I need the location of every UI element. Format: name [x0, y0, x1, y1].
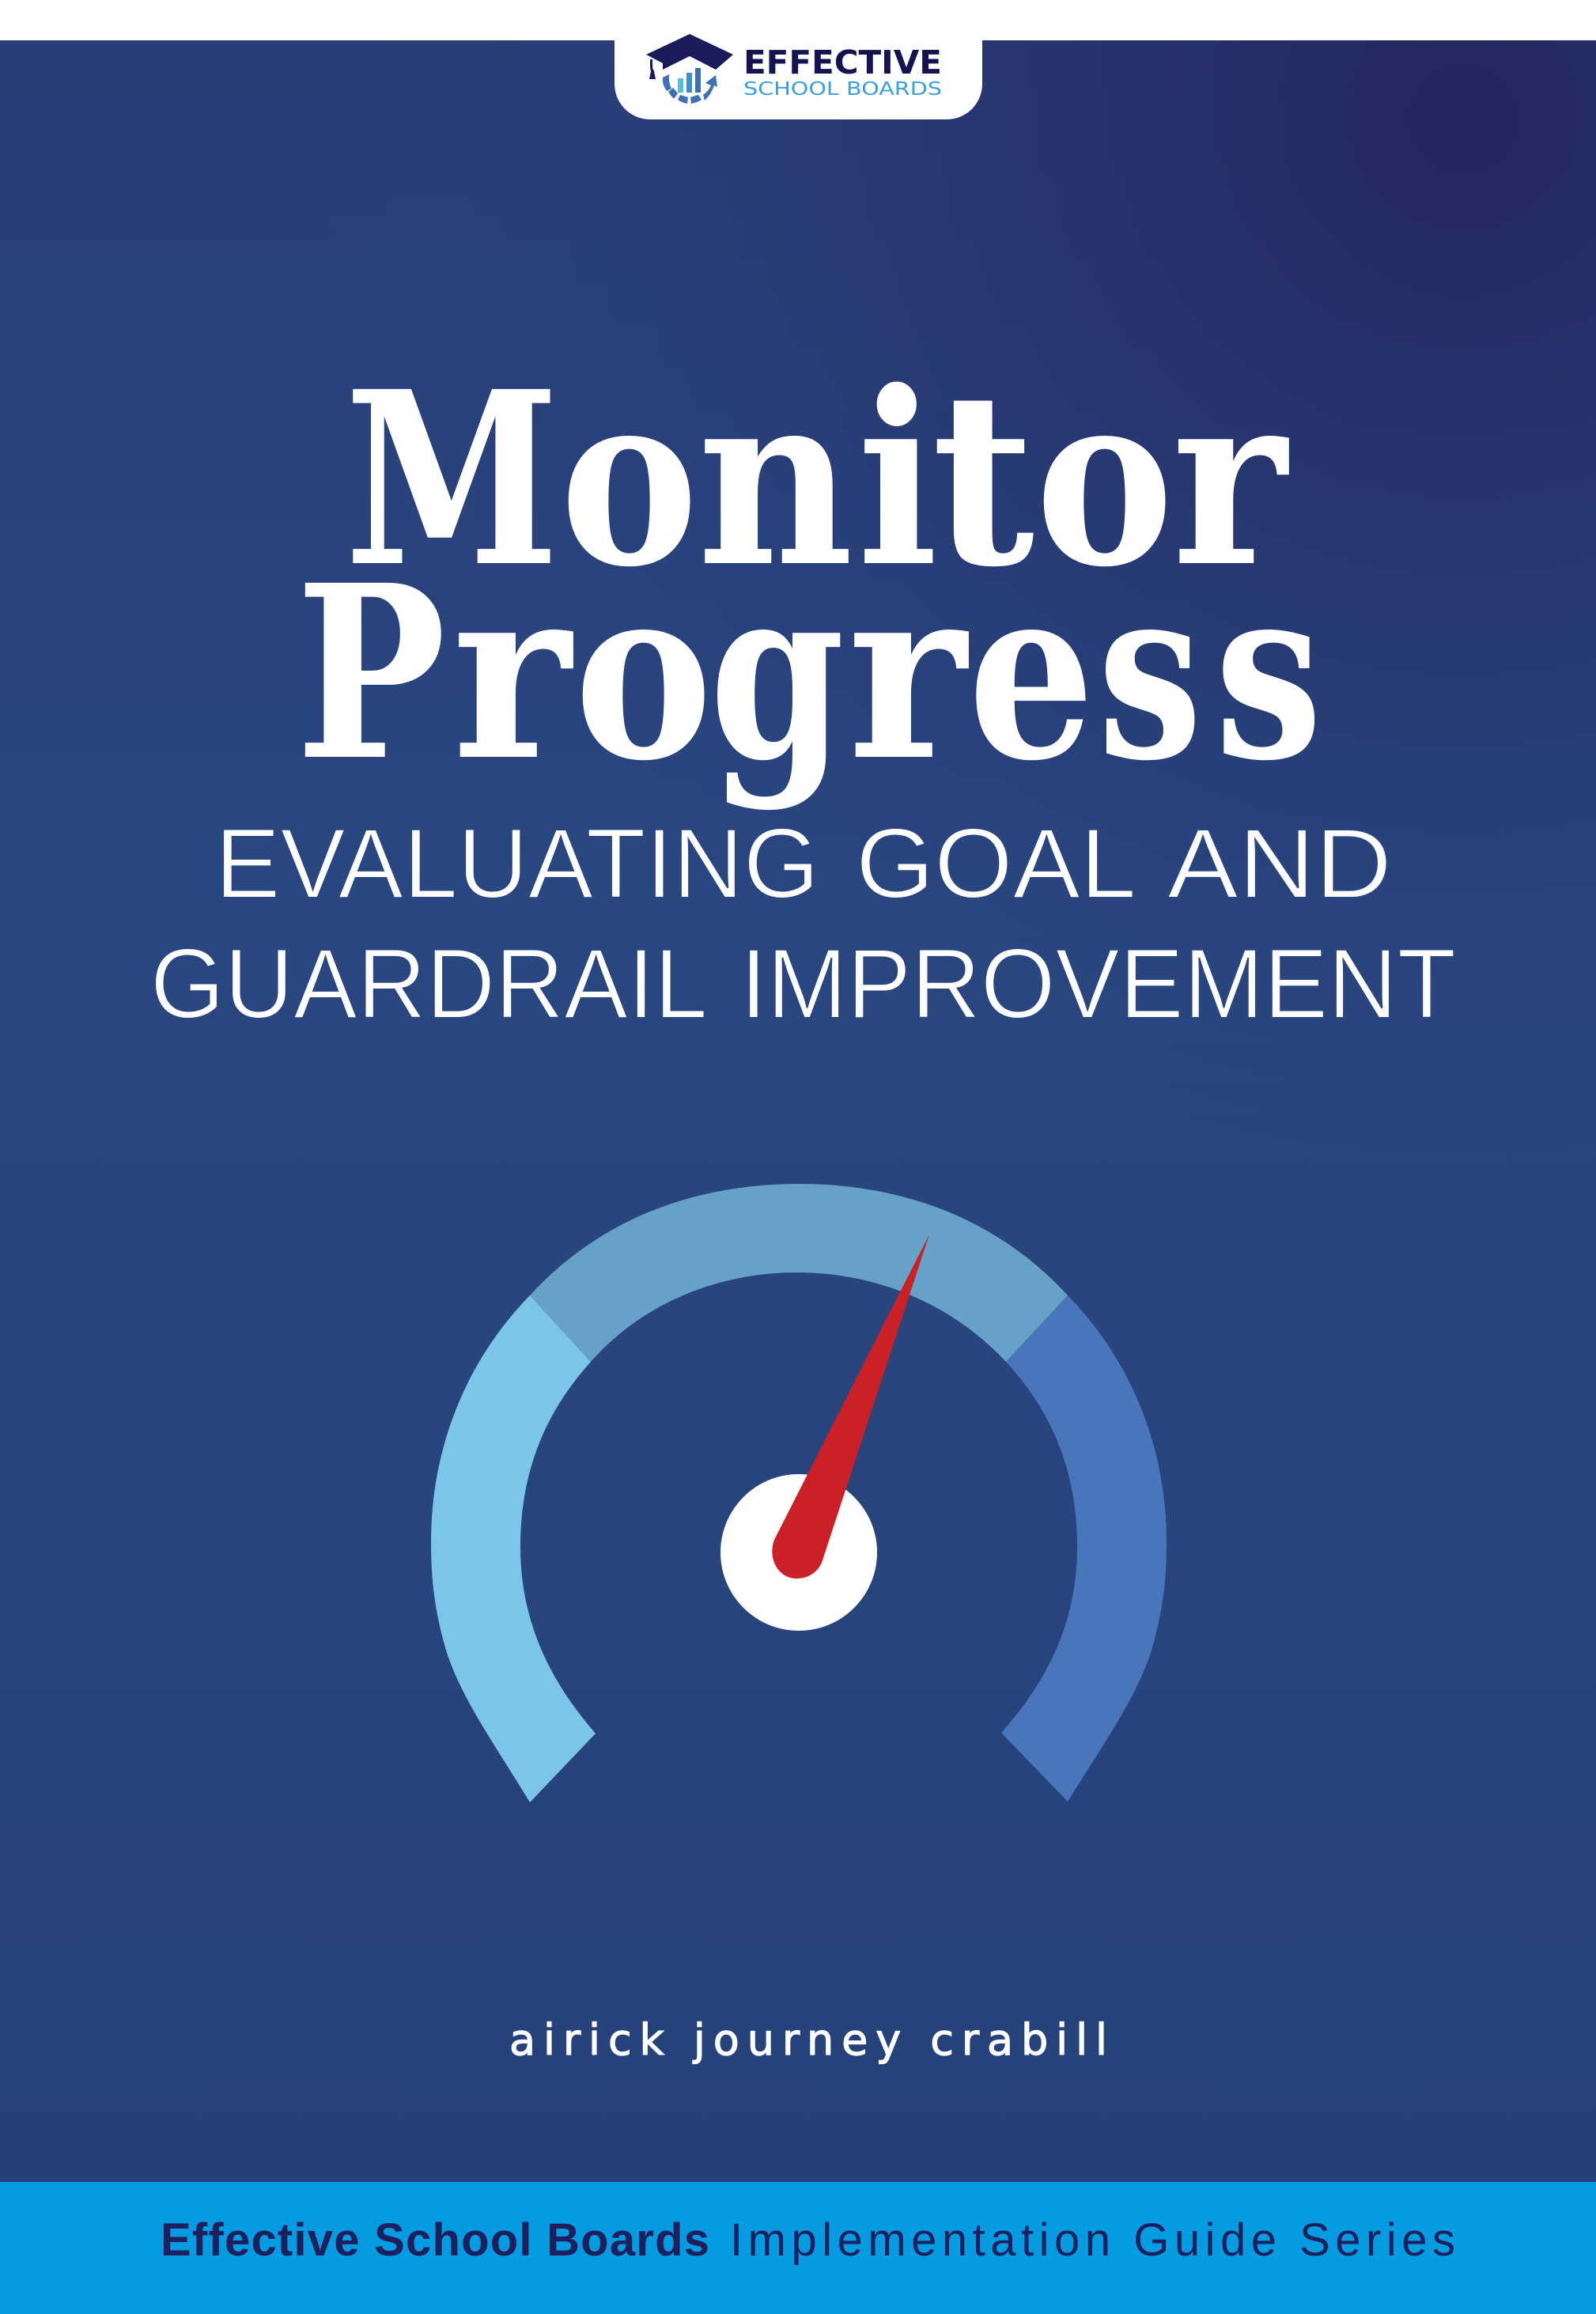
title: s	[1098, 533, 1202, 814]
title: o	[574, 533, 713, 814]
title: o	[560, 339, 698, 620]
gauge segment: right	[1001, 1295, 1167, 1802]
footer bar	[0, 2182, 1596, 2314]
title: g	[709, 533, 845, 814]
logo panel	[615, 34, 982, 119]
icon: graduation cap with chart	[646, 34, 733, 104]
title	[296, 339, 1322, 814]
title: r	[848, 533, 971, 814]
title: o	[1035, 339, 1174, 620]
subtitle: GUARDRAIL	[150, 929, 705, 1039]
subtitle	[150, 809, 1456, 1039]
gauge needle	[772, 1235, 929, 1579]
series label: Implementation Guide Series	[730, 2214, 1455, 2266]
subtitle: EVALUATING	[215, 809, 819, 919]
title: r	[452, 533, 576, 814]
gauge segment: left	[431, 1295, 596, 1802]
title: M	[345, 339, 559, 620]
gauge hub	[720, 1474, 877, 1631]
logo wordmark: SCHOOL BOARDS	[743, 79, 942, 100]
logo wordmark	[743, 43, 942, 100]
title: s	[1215, 533, 1322, 814]
title: n	[698, 339, 853, 620]
title: t	[932, 339, 1036, 620]
subtitle: IMPROVEMENT	[740, 929, 1456, 1039]
title: r	[1172, 339, 1291, 620]
series label	[161, 2214, 1455, 2266]
title: i	[857, 339, 938, 620]
series label: Effective School Boards	[161, 2214, 709, 2266]
gauge segment: top	[530, 1184, 1068, 1362]
title: e	[968, 533, 1095, 814]
title: P	[296, 533, 446, 814]
subtitle: GOAL	[856, 809, 1133, 919]
gauge	[431, 1184, 1167, 1802]
subtitle: AND	[1167, 809, 1392, 919]
author: airick journey crabill	[509, 2015, 1107, 2065]
logo wordmark: EFFECTIVE	[743, 43, 942, 81]
